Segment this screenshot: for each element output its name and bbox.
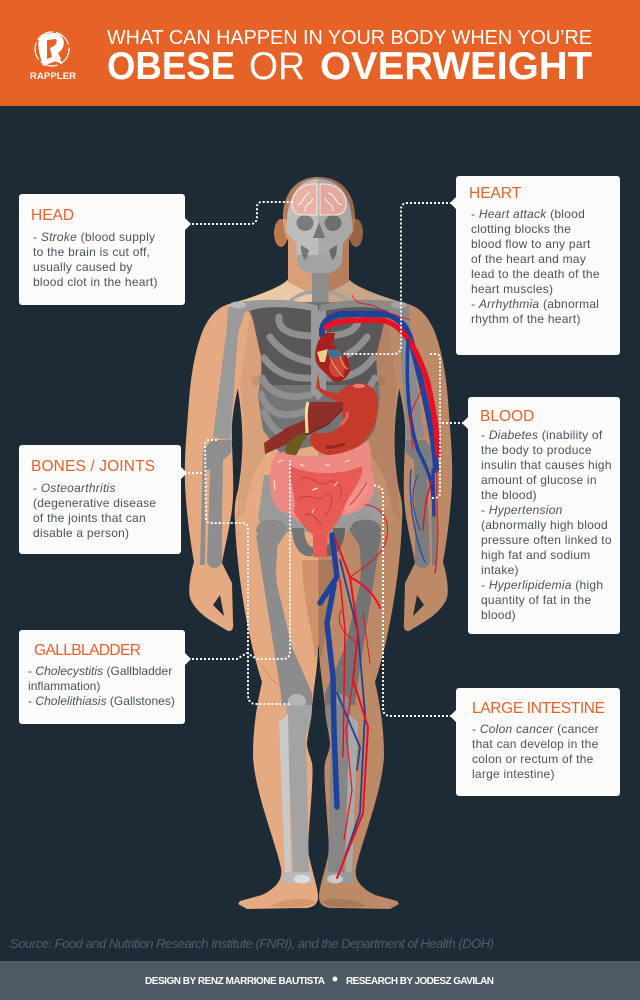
panel: large intestine — [450, 688, 620, 796]
text: blood conditions: the body to produce — [481, 443, 592, 457]
icon: brain — [292, 184, 346, 215]
text: blood conditions: blood) — [481, 608, 516, 622]
connector: heart — [343, 203, 456, 354]
human body figure — [185, 177, 452, 909]
pelvis — [256, 475, 382, 556]
text: head conditions: to the brain is cut off, — [33, 245, 150, 259]
heading: large intestine: LARGE INTESTINE — [472, 700, 605, 717]
footer credits: DESIGN BY RENZ MARRIONE BAUTISTA — [145, 976, 325, 987]
blood vessels: leg — [320, 505, 388, 878]
text: gallbladder conditions: inflammation) — [28, 679, 100, 693]
text: large intestine conditions: colon or rectum of the — [472, 752, 594, 766]
blood vessels: arm and chest — [322, 295, 438, 573]
text: heart conditions: - Heart attack (blood — [471, 207, 585, 221]
right leg bones — [325, 535, 381, 884]
footer credits — [0, 961, 640, 1000]
neck spine and collar — [290, 273, 350, 306]
text: bones conditions: disable a person) — [33, 526, 129, 540]
left arm bones — [200, 300, 318, 568]
text: head conditions: - Stroke (blood supply — [33, 230, 155, 244]
skin: left half — [185, 276, 318, 909]
text: blood conditions: quantity of fat in the — [481, 593, 591, 607]
panel: head — [19, 194, 191, 305]
text: large intestine conditions: - Colon cancer (cancer — [472, 722, 599, 736]
liver — [264, 402, 343, 454]
right arm bones — [319, 300, 437, 568]
source note: Source: Food and Nutrition Research Institute (FNRI), and the Department of Health (DOH) — [10, 936, 494, 951]
panel: bones and joints — [19, 445, 187, 554]
title: OBESE — [107, 45, 235, 88]
title: OR — [249, 45, 305, 88]
text: head conditions: usually caused by — [33, 260, 133, 274]
large and small intestine — [270, 440, 375, 557]
heading: heart: HEART — [469, 185, 522, 202]
connector: head — [188, 202, 293, 224]
text: gallbladder conditions: - Cholelithiasis (Gallstones) — [28, 694, 175, 708]
stomach — [310, 373, 378, 456]
heading: bones and joints: BONES / JOINTS — [31, 458, 155, 475]
text: heart conditions: - Arrhythmia (abnormal — [471, 297, 599, 311]
skull — [286, 179, 353, 275]
text: blood conditions: the blood) — [481, 488, 537, 502]
heading: gallbladder: GALLBLADDER — [34, 642, 141, 659]
title — [107, 27, 592, 88]
logo: Rappler — [30, 32, 76, 82]
text: blood conditions: intake) — [481, 563, 519, 577]
skin: right half — [318, 276, 452, 909]
text: bones conditions: - Osteoarthritis — [33, 481, 116, 495]
text: heart conditions: lead to the death of the — [471, 267, 600, 281]
text: heart conditions: heart muscles) — [471, 282, 553, 296]
text: heart conditions: clotting blocks the — [471, 222, 571, 236]
header banner — [0, 0, 640, 106]
text: blood conditions: - Hyperlipidemia (high — [481, 578, 603, 592]
connector: large intestine — [373, 485, 456, 716]
text: heart conditions: of the heart and may — [471, 252, 586, 266]
connector: gallbladder — [188, 460, 290, 659]
logo: Rappler: RAPPLER — [30, 71, 76, 82]
gallbladder — [285, 402, 308, 459]
text: large intestine conditions: that can develop in the — [472, 737, 599, 751]
text: blood conditions: - Hypertension — [481, 503, 563, 517]
icon: heart — [315, 333, 350, 382]
connector: blood — [430, 354, 468, 498]
text: blood conditions: high fat and sodium — [481, 548, 590, 562]
text: heart conditions: blood flow to any part — [471, 237, 591, 251]
text: blood conditions: pressure often linked to — [481, 533, 612, 547]
heading: blood: BLOOD — [480, 408, 534, 425]
heading: head: HEAD — [31, 207, 74, 224]
text: blood conditions: insulin that causes high — [481, 458, 612, 472]
footer credits: RESEARCH BY JODESZ GAVILAN — [346, 976, 494, 987]
title: WHAT CAN HAPPEN IN YOUR BODY WHEN YOU’RE — [107, 27, 592, 49]
text: large intestine conditions: large intestine) — [472, 767, 555, 781]
text: blood conditions: (abnormally high blood — [481, 518, 608, 532]
text: blood conditions: - Diabetes (inability of — [481, 428, 602, 442]
panel: heart — [450, 176, 620, 355]
text: bones conditions: (degenerative disease — [33, 496, 156, 510]
panel: gallbladder — [19, 630, 191, 724]
text: blood conditions: amount of glucose in — [481, 473, 597, 487]
left leg bones — [256, 535, 312, 884]
text: gallbladder conditions: - Cholecystitis (Gallbladder — [28, 664, 172, 678]
title: OVERWEIGHT — [320, 45, 592, 88]
text: bones conditions: of the joints that can — [33, 511, 146, 525]
head and ears — [274, 177, 363, 298]
connector: bones and joints — [184, 440, 290, 704]
text: heart conditions: rhythm of the heart) — [471, 312, 581, 326]
text: head conditions: blood clot in the heart) — [33, 275, 158, 289]
ribcage — [243, 302, 395, 453]
panel: blood — [462, 397, 620, 634]
